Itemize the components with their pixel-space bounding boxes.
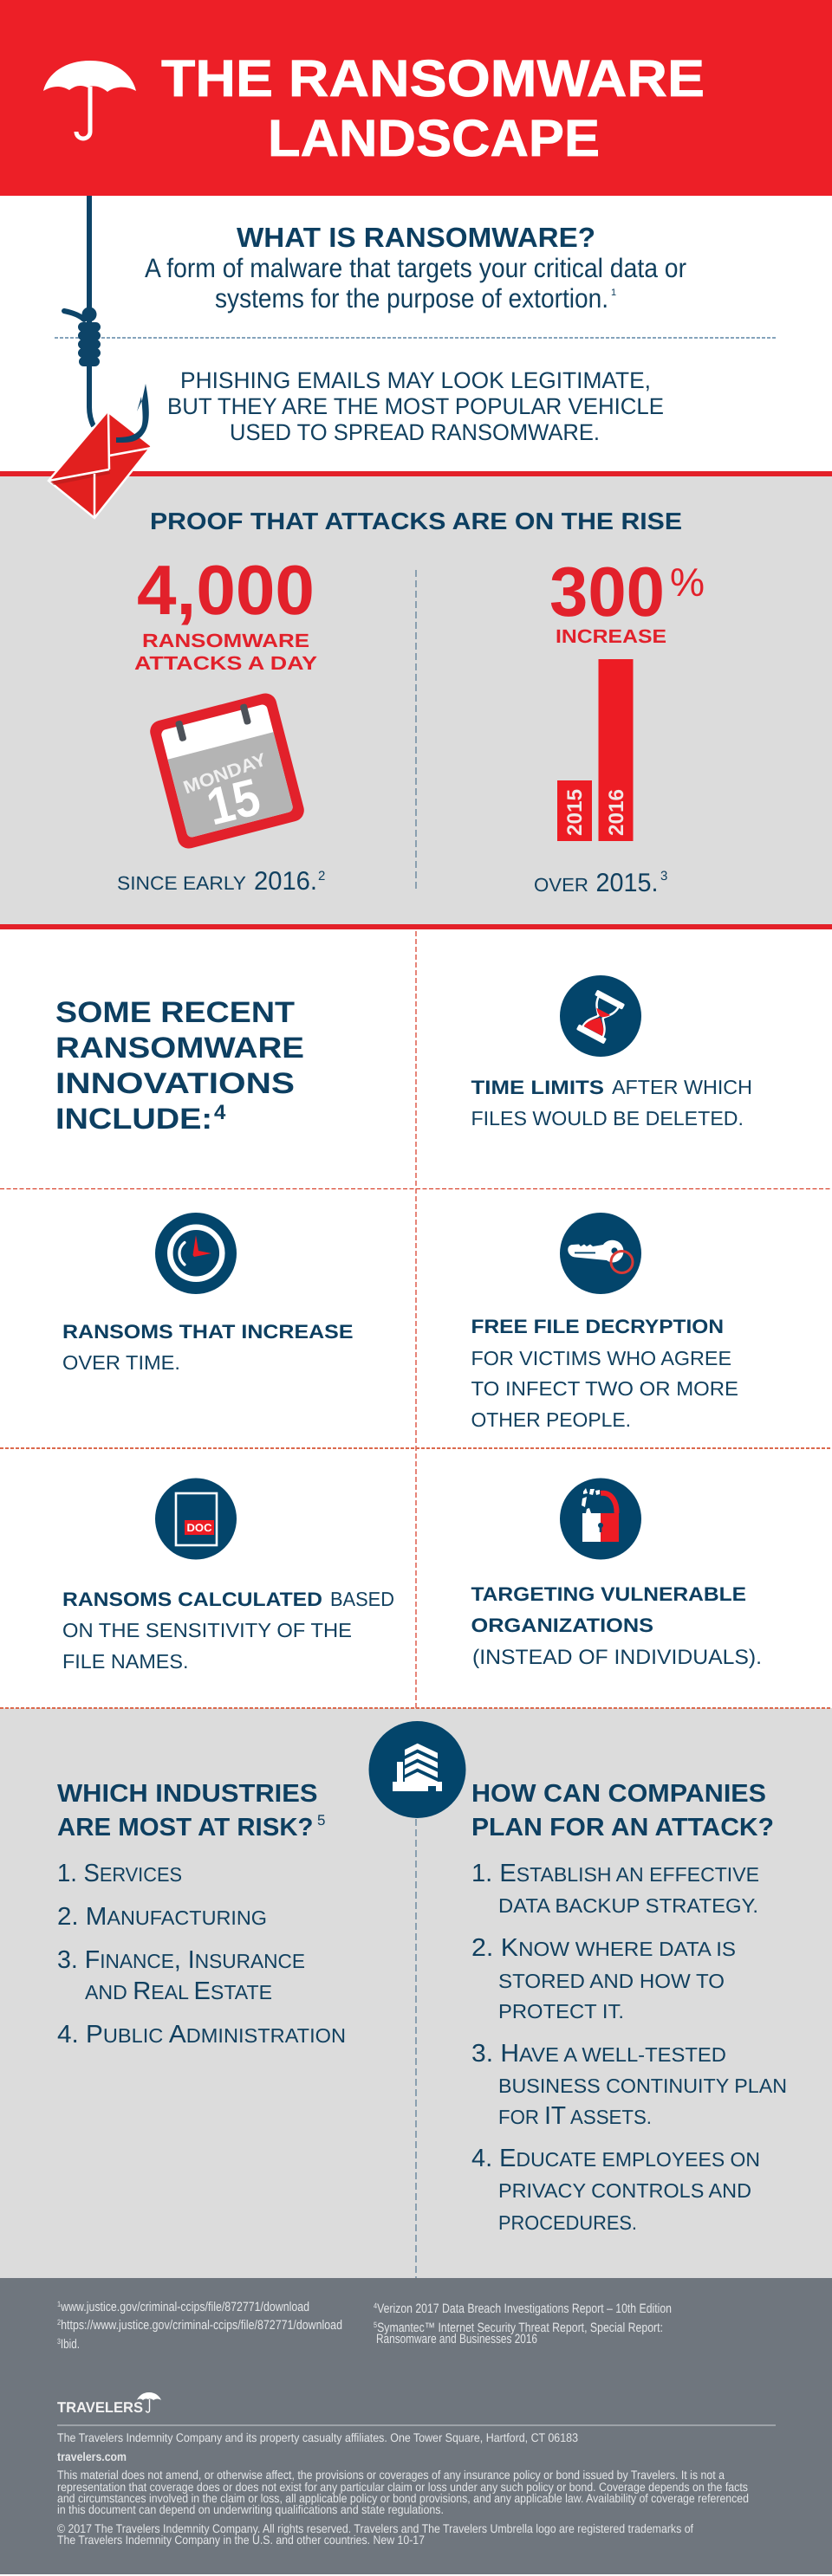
section: how can companies plan — [471, 1780, 787, 2234]
stat: 300% increase: INCREASE — [556, 625, 666, 647]
text block: disclaimer: representation that coverage does or does not exist for any particular claim or loss under any such policy or bond. Coverage depends on the facts — [57, 2480, 748, 2494]
title: THE RANSOMWARE — [161, 49, 705, 107]
section: which industries — [57, 1780, 346, 2049]
list: industries: 3. FINANCE, INSURANCE — [57, 1946, 305, 1974]
text block: footnotes left: 2 — [57, 2318, 61, 2327]
text: targeting vulnerable organizations: ORGANIZATIONS — [471, 1615, 653, 1636]
list: planning steps — [471, 1860, 787, 2234]
icon: clock — [155, 1213, 237, 1294]
text block: footnotes left: 1 — [57, 2300, 61, 2308]
icon: office building — [369, 1721, 466, 1818]
heading: which industries: 5 — [317, 1812, 325, 1828]
stat: 300% increase — [549, 553, 705, 647]
item: free file decryption — [471, 1213, 738, 1431]
caption: over 2015: 2015. — [596, 869, 659, 897]
text block: footnotes left: www.justice.gov/criminal-ccips/file/872771/download — [60, 2300, 309, 2314]
text block: footnotes right: 5 — [374, 2320, 377, 2329]
text block: disclaimer: This material does not amend, or otherwise affect, the provisions or coverages of any insurance policy or bond issued by Travelers. It is not a — [57, 2468, 725, 2482]
logo: Travelers: TRAVELERS — [57, 2399, 143, 2416]
heading: how can companies plan: HOW CAN COMPANIES — [471, 1780, 766, 1808]
heading: which industries: WHICH INDUSTRIES — [57, 1780, 317, 1808]
text: targeting vulnerable organizations: (INSTEAD OF INDIVIDUALS). — [472, 1646, 762, 1669]
title: LANDSCAPE — [268, 109, 600, 167]
bar: 2015: 2015 — [563, 789, 587, 836]
text block: footnotes right — [374, 2301, 672, 2346]
list: industries: 4. PUBLIC ADMINISTRATION — [57, 2021, 346, 2049]
text block: phishing statement: USED TO SPREAD RANSOMWARE. — [230, 419, 600, 445]
item: ransoms calculated — [62, 1478, 394, 1673]
text block: phishing statement: PHISHING EMAILS MAY LOOK LEGITIMATE, — [180, 367, 651, 393]
list: planning steps: 2. KNOW WHERE DATA IS — [471, 1934, 736, 1962]
stat: 4,000 attacks a day: RANSOMWARE — [142, 630, 309, 651]
text: free file decryption: OTHER PEOPLE. — [471, 1408, 631, 1431]
panel: header banner — [0, 0, 832, 196]
heading: how can companies plan: PLAN FOR AN ATTACK? — [471, 1814, 774, 1841]
text: ransoms calculated: ON THE SENSITIVITY OF THE — [62, 1619, 352, 1641]
text: ransoms that increase — [62, 1321, 354, 1374]
panel: industries and planning — [0, 1708, 832, 2278]
list: planning steps: PROCEDURES. — [498, 2211, 637, 2234]
text block: disclaimer: and circumstances involved in the claim or loss, all applicable policy or bond provisions, and any applicable law. Availability of coverage referenced — [57, 2491, 749, 2505]
text block: definition — [145, 253, 686, 314]
text block: copyright: The Travelers Indemnity Company in the U.S. and other countries. New 10-17 — [57, 2533, 425, 2547]
icon: document — [155, 1478, 237, 1559]
caption: since early 2016: SINCE EARLY — [117, 872, 246, 894]
icon: calendar: 15 — [201, 767, 266, 836]
bar: 2016: 2016 — [605, 789, 628, 836]
heading: some recent ransomware innovations: SOME RECENT — [55, 996, 295, 1029]
heading: what is ransomware: WHAT IS RANSOMWARE? — [237, 222, 595, 253]
text: free file decryption: TO INFECT TWO OR MORE — [471, 1377, 738, 1400]
text: time limits: AFTER WHICH — [612, 1076, 752, 1098]
text block: footnotes left: Ibid. — [61, 2337, 80, 2352]
stat: 300% increase: % — [670, 560, 705, 605]
text: free file decryption: FREE FILE DECRYPTION — [471, 1316, 724, 1337]
caption: since early 2016: 2016. — [254, 867, 317, 896]
bar: 2015 — [557, 780, 592, 841]
list: planning steps: BUSINESS CONTINUITY PLAN — [498, 2074, 787, 2097]
text block: address: The Travelers Indemnity Company and its property casualty affiliates. One Tower Square, Hartford, CT 06183 — [57, 2430, 578, 2444]
logo: Travelers — [57, 2392, 161, 2416]
stat: 300% increase: 300 — [549, 553, 665, 631]
icon: fishing hook with phishing envelope — [49, 196, 152, 518]
heading: proof: PROOF THAT ATTACKS ARE ON THE RISE — [150, 508, 682, 534]
text block: footnotes right: 4 — [374, 2301, 377, 2310]
text: time limits: TIME LIMITS — [471, 1077, 604, 1098]
text block: footnotes right: Verizon 2017 Data Breach Investigations Report – 10th Edition — [377, 2301, 672, 2316]
heading: which industries: ARE MOST AT RISK? — [57, 1814, 314, 1841]
text block: definition: A form of malware that targets your critical data or — [145, 253, 686, 283]
text block: phishing statement: BUT THEY ARE THE MOST POPULAR VEHICLE — [167, 393, 664, 419]
list: industries — [57, 1860, 346, 2049]
heading: how can companies plan — [471, 1780, 774, 1841]
caption: since early 2016: 2 — [318, 869, 325, 883]
text block: footnotes left: 3 — [57, 2337, 61, 2346]
panel: footer — [0, 2278, 832, 2574]
caption: over 2015: OVER — [534, 874, 588, 896]
caption: since early 2016 — [117, 867, 325, 896]
text block: phishing statement — [167, 367, 664, 445]
text: ransoms calculated: RANSOMS CALCULATED — [62, 1589, 322, 1610]
icon: Travelers umbrella — [43, 61, 136, 139]
list: planning steps: PROTECT IT. — [498, 2000, 624, 2023]
item: time limits — [471, 975, 752, 1129]
text: time limits — [471, 1076, 752, 1129]
stat: 4,000 attacks a day: ATTACKS A DAY — [134, 652, 317, 674]
icon: broken padlock — [560, 1478, 641, 1559]
text: ransoms calculated: FILE NAMES. — [62, 1650, 189, 1673]
stat: 4,000 attacks a day — [134, 552, 317, 674]
text: targeting vulnerable organizations: TARGETING VULNERABLE — [471, 1583, 746, 1605]
text block: website: travelers.com — [57, 2450, 127, 2463]
icon: calendar — [147, 691, 307, 851]
list: industries: 2. MANUFACTURING — [57, 1903, 267, 1931]
list: planning steps: FOR IT ASSETS. — [498, 2102, 652, 2130]
heading: some recent ransomware innovations: INCLUDE: — [55, 1103, 212, 1136]
caption: over 2015: 3 — [660, 869, 667, 883]
bar chart: 2015 vs 2016 — [557, 659, 633, 841]
heading: some recent ransomware innovations: 4 — [214, 1101, 226, 1124]
text: ransoms that increase: OVER TIME. — [62, 1351, 180, 1374]
text block: definition: systems for the purpose of extortion. — [215, 283, 608, 314]
text: ransoms that increase: RANSOMS THAT INCREASE — [62, 1321, 354, 1343]
text: ransoms calculated — [62, 1588, 394, 1673]
heading: some recent ransomware innovations: RANSOMWARE — [55, 1032, 304, 1065]
icon: hourglass — [560, 975, 641, 1057]
stat: 4,000 attacks a day: 4,000 — [137, 552, 315, 630]
item: ransoms that increase — [62, 1213, 354, 1374]
text: free file decryption: FOR VICTIMS WHO AGREE — [471, 1347, 731, 1369]
list: planning steps: STORED AND HOW TO — [498, 1970, 725, 1992]
icon: document: DOC — [187, 1522, 211, 1534]
item: targeting vulnerable organizations — [471, 1478, 762, 1669]
panel: proof that attacks are on the rise — [0, 471, 832, 929]
text block: footnotes right: Symantec™ Internet Security Threat Report, Special Report: — [377, 2320, 663, 2335]
text block: definition: 1 — [611, 288, 616, 298]
list: planning steps: 4. EDUCATE EMPLOYEES ON — [471, 2145, 760, 2172]
text: time limits: FILES WOULD BE DELETED. — [471, 1107, 744, 1129]
caption: over 2015 — [534, 869, 667, 897]
bar: 2016 — [598, 659, 633, 841]
text: free file decryption — [471, 1316, 738, 1431]
list: industries: AND REAL ESTATE — [85, 1977, 272, 2005]
title — [161, 49, 705, 167]
panel: ransomware innovations grid — [0, 931, 832, 1708]
heading: some recent ransomware innovations: INNOVATIONS — [55, 1067, 295, 1100]
heading: which industries — [57, 1780, 325, 1841]
text: targeting vulnerable organizations — [471, 1583, 762, 1669]
icon: key — [560, 1213, 641, 1294]
icon: calendar: MONDAY — [181, 750, 269, 798]
text block: disclaimer: in this document can depend on underwriting qualifications and state regulations. — [57, 2502, 444, 2516]
text block: footnotes left — [57, 2300, 342, 2352]
heading: some recent ransomware innovations — [55, 996, 304, 1136]
text block: footnotes left: https://www.justice.gov/criminal-ccips/file/872771/download — [61, 2318, 342, 2333]
panel: what is ransomware — [55, 222, 777, 445]
text block: disclaimer — [57, 2468, 749, 2516]
list: industries: 1. SERVICES — [57, 1860, 182, 1887]
text block: copyright — [57, 2521, 693, 2547]
list: planning steps: DATA BACKUP STRATEGY. — [498, 1894, 758, 1917]
text block: footnotes right: Ransomware and Businesses 2016 — [376, 2332, 537, 2346]
list: planning steps: 3. HAVE A WELL-TESTED — [471, 2040, 726, 2068]
list: planning steps: PRIVACY CONTROLS AND — [498, 2179, 751, 2202]
text: ransoms calculated: BASED — [330, 1588, 394, 1610]
list: planning steps: 1. ESTABLISH AN EFFECTIVE — [471, 1860, 759, 1887]
text block: copyright: © 2017 The Travelers Indemnity Company. All rights reserved. Travelers and The Travelers Umbrella logo are registered trademarks of — [57, 2521, 693, 2535]
